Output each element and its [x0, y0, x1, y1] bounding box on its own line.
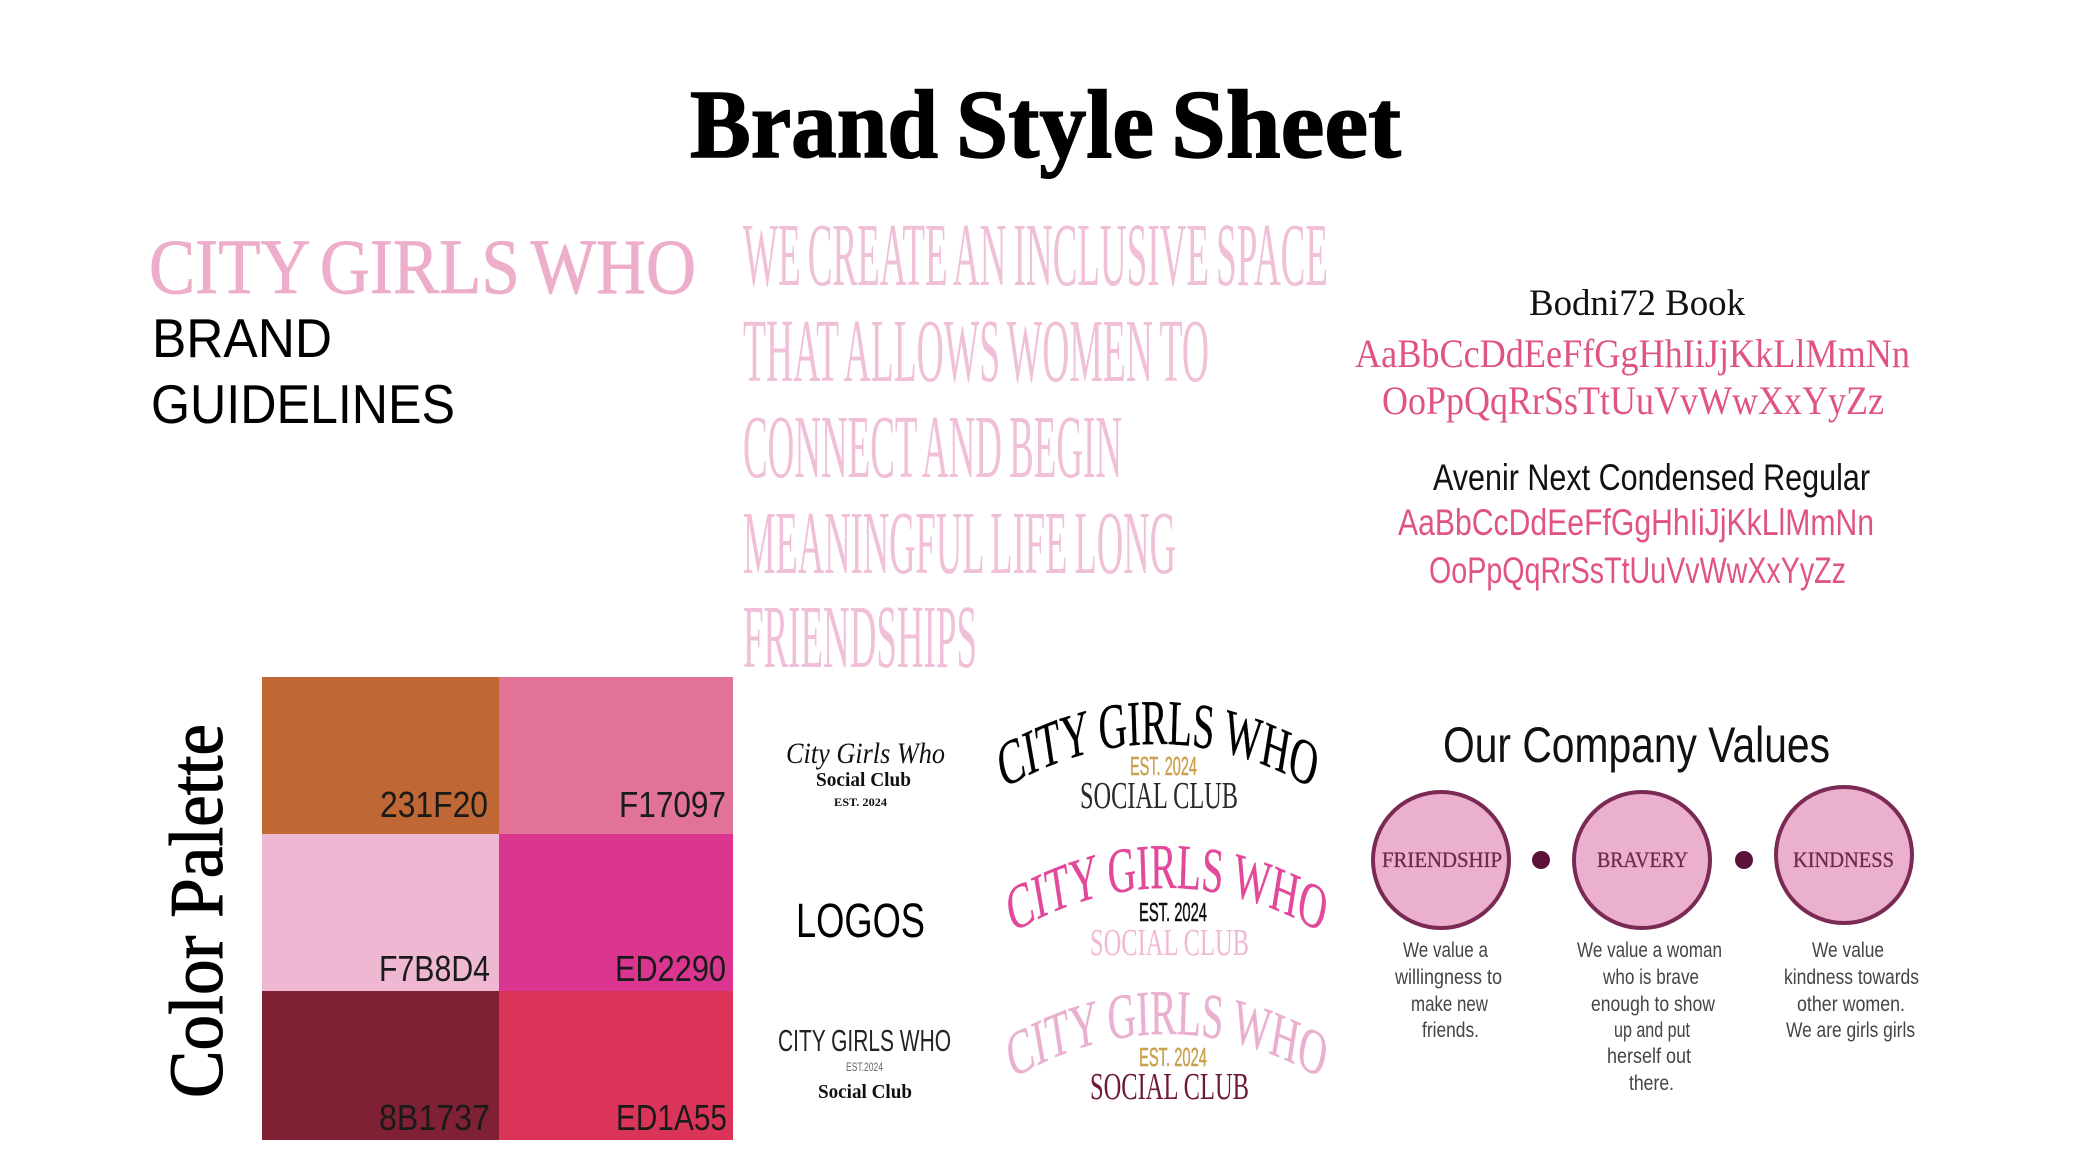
title: Style: [956, 71, 1154, 179]
mission statement: FRIENDSHIPS: [743, 588, 977, 687]
logo: pink arched: EST. 2024: [1139, 897, 1207, 927]
logo: stacked wordmark: EST.2024: [846, 1060, 883, 1074]
connector dot: [1735, 851, 1753, 869]
value: kindness: We are girls girls: [1786, 1019, 1915, 1042]
value: bravery: [1574, 792, 1722, 1095]
guidelines label: GUIDELINES: [151, 373, 455, 435]
logo: light pink arched: EST. 2024: [1139, 1042, 1207, 1072]
swatch ED1A55: [499, 991, 733, 1140]
value: friendship: [1373, 792, 1509, 1042]
logo: italic wordmark: [786, 737, 945, 809]
guidelines label: BRAND: [152, 307, 332, 369]
mission statement: [743, 206, 1328, 687]
logo: light pink arched: CITY GIRLS WHO: [1008, 992, 1326, 1074]
sans alphabet: [1398, 502, 1874, 591]
serif font name: Bodni72 Book: [1529, 283, 1745, 324]
logo: pink arched: CITY GIRLS WHO: [1008, 846, 1326, 928]
swatch ED2290: [499, 834, 733, 991]
guidelines label: [151, 307, 455, 435]
palette heading: Color Palette: [155, 724, 239, 1098]
value: kindness: kindness towards: [1784, 966, 1919, 989]
value: bravery: who is brave: [1602, 966, 1699, 989]
mission statement: CONNECT AND BEGIN: [743, 398, 1122, 497]
swatch F17097: [499, 677, 733, 834]
swatch 231F20: [262, 677, 499, 834]
logo: pink arched: SOCIAL CLUB: [1090, 922, 1249, 964]
logo: italic wordmark: City Girls Who: [786, 737, 945, 770]
logo: black arched: CITY GIRLS WHO: [999, 702, 1317, 784]
connector dot: [1532, 851, 1550, 869]
logo: italic wordmark: Social Club: [816, 769, 911, 791]
value: kindness: [1776, 787, 1919, 1042]
serif alphabet: AaBbCcDdEeFfGgHhIiJjKkLlMmNn: [1355, 331, 1910, 376]
swatch 231F20: 231F20: [380, 784, 488, 825]
sans alphabet: AaBbCcDdEeFfGgHhIiJjKkLlMmNn: [1398, 502, 1874, 543]
logo: light pink arched: SOCIAL CLUB: [1090, 1066, 1249, 1108]
value: bravery: there.: [1629, 1072, 1674, 1095]
logo: stacked wordmark: Social Club: [818, 1081, 912, 1103]
title: Sheet: [1171, 71, 1401, 179]
sans font name: Avenir Next Condensed Regular: [1433, 457, 1870, 498]
value: bravery: herself out: [1607, 1045, 1691, 1068]
swatch ED2290: ED2290: [615, 948, 726, 989]
title: [690, 71, 1401, 179]
value: bravery: up and put: [1614, 1019, 1690, 1042]
panel: brand guidelines heading: [149, 223, 696, 435]
value: bravery: We value a woman: [1577, 939, 1722, 962]
value: friendship: willingness to: [1394, 966, 1502, 989]
value: friendship: We value a: [1403, 939, 1488, 962]
sans alphabet: OoPpQqRrSsTtUuVvWwXxYyZz: [1429, 550, 1846, 591]
panel: color palette: [155, 677, 733, 1140]
swatch F17097: F17097: [619, 784, 726, 825]
logo: stacked wordmark: [778, 1023, 951, 1103]
swatch ED1A55: ED1A55: [616, 1097, 727, 1138]
logo: italic wordmark: EST. 2024: [834, 795, 887, 809]
logo: stacked wordmark: CITY GIRLS WHO: [778, 1023, 951, 1058]
logo: black arched: SOCIAL CLUB: [1080, 775, 1238, 817]
serif alphabet: [1355, 331, 1910, 423]
mission statement: THAT ALLOWS WOMEN TO: [743, 302, 1209, 401]
value: friendship: make new: [1411, 993, 1489, 1016]
panel: logos: [778, 702, 1326, 1108]
swatch 8B1737: [262, 991, 499, 1140]
swatch F7B8D4: [262, 834, 499, 991]
value: bravery: BRAVERY: [1597, 847, 1688, 872]
value: friendship: friends.: [1422, 1019, 1479, 1042]
values heading: Our Company Values: [1443, 717, 1830, 773]
panel: company values: [1373, 717, 1919, 1095]
value: kindness: other women.: [1797, 993, 1905, 1016]
value: kindness: We value: [1812, 939, 1884, 962]
mission statement: MEANINGFUL LIFE LONG: [743, 494, 1176, 593]
value: friendship: FRIENDSHIP: [1382, 847, 1502, 872]
logo: black arched: EST. 2024: [1130, 751, 1197, 781]
panel: typography: [1355, 283, 1910, 591]
swatch F7B8D4: F7B8D4: [379, 948, 490, 989]
title: Brand: [690, 71, 938, 179]
swatch 8B1737: 8B1737: [379, 1097, 490, 1138]
brand name: CITY GIRLS WHO: [149, 223, 696, 310]
logos label: LOGOS: [796, 895, 925, 948]
value: kindness: KINDNESS: [1793, 847, 1894, 872]
value: bravery: enough to show: [1591, 993, 1716, 1016]
serif alphabet: OoPpQqRrSsTtUuVvWwXxYyZz: [1382, 378, 1884, 423]
